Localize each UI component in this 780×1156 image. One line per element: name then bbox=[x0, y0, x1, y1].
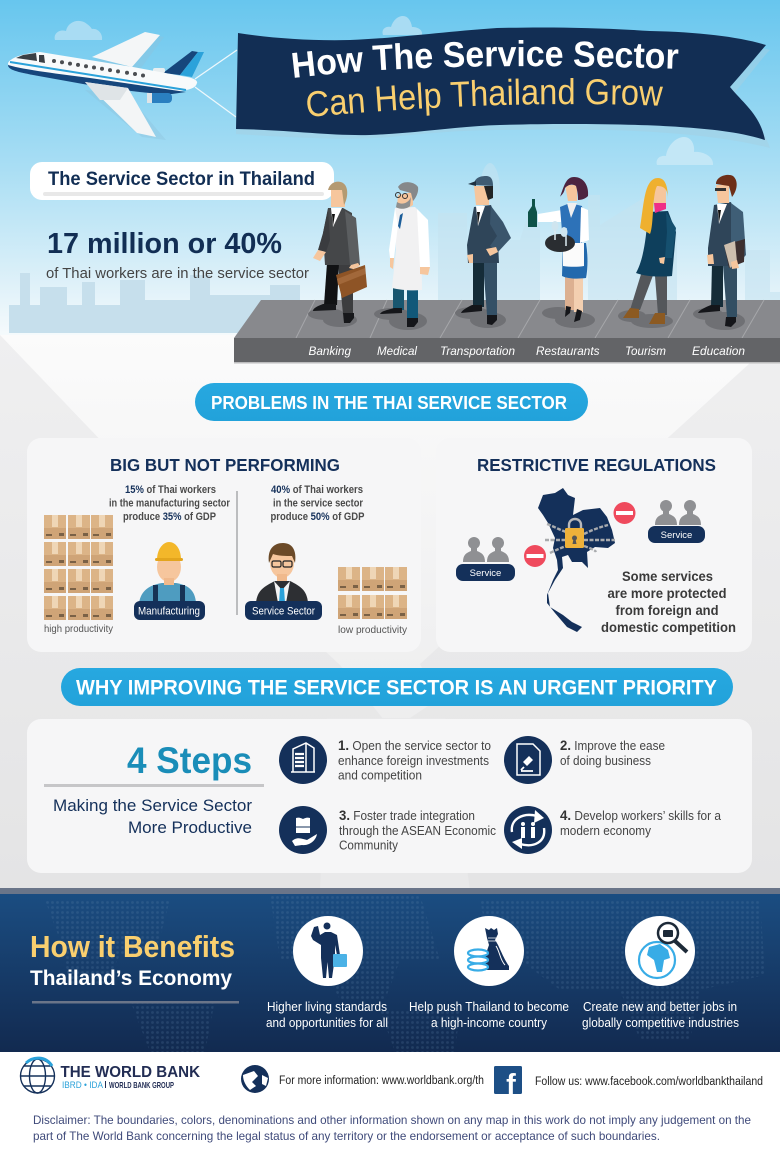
figure: education bbox=[698, 175, 746, 327]
statistic: 17 million: of Thai workers are in the service sector bbox=[46, 265, 309, 282]
step 2: 2. Improve the ease bbox=[560, 737, 665, 753]
heading: urgent priority: WHY IMPROVING THE SERVICE SECTOR IS AN URGENT PRIORITY bbox=[76, 676, 717, 700]
caption: Help push Thailand to become bbox=[409, 1000, 569, 1014]
sector labels bbox=[308, 344, 745, 358]
regulation text: Some services bbox=[622, 569, 713, 584]
manufacturing text bbox=[109, 484, 231, 523]
logo: The World Bank: IBRD • IDA bbox=[62, 1080, 104, 1091]
icon: building bbox=[279, 736, 327, 784]
figure: restaurants bbox=[528, 177, 589, 322]
step 4: 4. Develop workers’ skills for a bbox=[560, 807, 721, 823]
caption: Higher living standards bbox=[267, 1000, 387, 1014]
logo: The World Bank: WORLD BANK GROUP bbox=[109, 1080, 174, 1090]
step 3: 3. Foster trade integration bbox=[339, 807, 475, 823]
manufacturing text: 15% of Thai workers bbox=[125, 484, 216, 496]
title banner: Can Help Thailand Grow bbox=[307, 78, 663, 116]
section heading: service sector in Thailand: The Service Sector in Thailand bbox=[48, 169, 315, 190]
step 1: 1. Open the service sector to bbox=[338, 737, 491, 753]
heading: urgent priority bbox=[61, 668, 733, 706]
step 2: of doing business bbox=[560, 754, 651, 768]
service text: produce 50% of GDP bbox=[270, 511, 364, 523]
figure: banking bbox=[313, 182, 367, 323]
sector labels: Medical bbox=[377, 344, 417, 358]
icon: globe and magnifier bbox=[625, 916, 695, 986]
disclaimer bbox=[33, 1113, 751, 1143]
pill: service sector: Service Sector bbox=[252, 606, 315, 618]
caption bbox=[582, 1000, 739, 1030]
title banner bbox=[236, 28, 770, 148]
icon: people with arrows bbox=[504, 806, 552, 854]
icon: website globe bbox=[241, 1065, 269, 1093]
caption: Create new and better jobs in bbox=[583, 1000, 737, 1014]
service group left: Service bbox=[470, 568, 501, 579]
footer background bbox=[0, 1052, 780, 1156]
step 3: through the ASEAN Economic bbox=[339, 824, 496, 838]
logo: The World Bank bbox=[20, 1058, 200, 1093]
disclaimer: Disclaimer: The boundaries, colors, denominations and other information shown on any map in this work do not imply any judgement on the bbox=[33, 1113, 751, 1127]
step 3 bbox=[339, 807, 496, 852]
boxes: high productivity bbox=[44, 515, 113, 620]
sector labels: Transportation bbox=[440, 344, 515, 358]
heading: 4 steps: 4 Steps bbox=[127, 740, 252, 781]
sector labels: Education bbox=[692, 344, 745, 358]
service group right: Service bbox=[661, 530, 692, 541]
regulation text: from foreign and bbox=[616, 603, 718, 618]
heading: how it benefits: How it Benefits bbox=[30, 929, 235, 964]
manufacturing text: produce 35% of GDP bbox=[123, 511, 216, 523]
heading: problems bbox=[195, 383, 588, 421]
figure: transportation bbox=[461, 176, 511, 325]
step 2 bbox=[560, 737, 665, 768]
disclaimer: part of The World Bank concerning the legal status of any territory or the endorsement or acceptance of such boundaries. bbox=[33, 1129, 660, 1143]
windows bbox=[52, 59, 145, 78]
statistic: 17 million: 17 million or 40% bbox=[47, 228, 282, 260]
label: high productivity bbox=[44, 623, 114, 635]
manufacturing text: in the manufacturing sector bbox=[109, 498, 231, 510]
service group right bbox=[648, 500, 705, 543]
subheading: Making the Service Sector bbox=[53, 796, 252, 815]
heading: BIG BUT NOT PERFORMING bbox=[110, 455, 340, 475]
service text: in the service sector bbox=[273, 498, 364, 510]
service text: 40% of Thai workers bbox=[271, 484, 363, 496]
step 3: Community bbox=[339, 838, 399, 852]
band: how it benefits bbox=[0, 888, 780, 1052]
step 1: enhance foreign investments bbox=[338, 754, 489, 768]
panel: 4 steps: More Productive bbox=[128, 818, 252, 837]
map of Thailand with chains and lock bbox=[538, 488, 615, 632]
regulation text: domestic competition bbox=[601, 620, 736, 635]
sector labels: Banking bbox=[308, 344, 351, 358]
panel: big but not performing bbox=[27, 438, 421, 652]
heading: problems: PROBLEMS IN THE THAI SERVICE SECTOR bbox=[211, 392, 567, 413]
clouds bbox=[55, 16, 713, 165]
platform bbox=[234, 300, 780, 364]
page background bbox=[0, 335, 780, 890]
icon: manufacturing worker bbox=[139, 542, 196, 603]
pill: service sector bbox=[245, 601, 322, 620]
label: low productivity bbox=[338, 624, 408, 636]
icon: document bbox=[504, 736, 552, 784]
icon: book and hand bbox=[279, 806, 327, 854]
pill: manufacturing bbox=[134, 601, 205, 620]
skyline bbox=[9, 163, 780, 333]
boxes: low productivity bbox=[338, 567, 407, 619]
service text bbox=[270, 484, 364, 523]
icon: businessman bbox=[293, 916, 363, 986]
world map dots bbox=[45, 895, 765, 1052]
step 4: modern economy bbox=[560, 824, 652, 838]
icon: facebook: f bbox=[506, 1069, 516, 1101]
panel: 4 steps bbox=[27, 719, 752, 873]
title text: How The Service Sector bbox=[292, 40, 678, 78]
sector labels: Tourism bbox=[625, 344, 666, 358]
facebook text: Follow us: www.facebook.com/worldbankthailand bbox=[535, 1076, 763, 1088]
caption: and opportunities for all bbox=[266, 1016, 388, 1030]
step 1 bbox=[338, 737, 491, 782]
icon: no entry left bbox=[524, 545, 546, 567]
regulation text: are more protected bbox=[608, 586, 726, 601]
service group left bbox=[456, 537, 515, 581]
band: how it benefits: Thailand’s Economy bbox=[30, 967, 232, 990]
step 4 bbox=[560, 807, 721, 838]
sector labels: Restaurants bbox=[536, 344, 600, 358]
airplane bbox=[8, 32, 237, 140]
figure: medical bbox=[380, 182, 430, 327]
banner ropes bbox=[195, 50, 237, 117]
website text: For more information: www.worldbank.org/th bbox=[279, 1075, 484, 1087]
step 1: and competition bbox=[338, 768, 422, 782]
pill: manufacturing: Manufacturing bbox=[138, 606, 200, 618]
statistic: 17 million bbox=[46, 228, 309, 282]
regulation text bbox=[601, 569, 736, 635]
caption bbox=[266, 1000, 388, 1030]
icon: facebook bbox=[494, 1066, 522, 1101]
caption: a high-income country bbox=[431, 1016, 548, 1030]
figure: tourism bbox=[623, 178, 676, 324]
caption bbox=[409, 1000, 569, 1030]
icon: service sector worker bbox=[256, 543, 308, 603]
panel: restrictive regulations bbox=[436, 438, 752, 652]
heading: RESTRICTIVE REGULATIONS bbox=[477, 455, 716, 475]
icon: money bag and coins bbox=[454, 916, 524, 986]
caption: globally competitive industries bbox=[582, 1016, 739, 1030]
logo: The World Bank: THE WORLD BANK bbox=[60, 1064, 200, 1081]
sky background bbox=[0, 0, 780, 335]
section heading: service sector in Thailand bbox=[30, 162, 334, 200]
icon: no entry right bbox=[614, 502, 636, 524]
